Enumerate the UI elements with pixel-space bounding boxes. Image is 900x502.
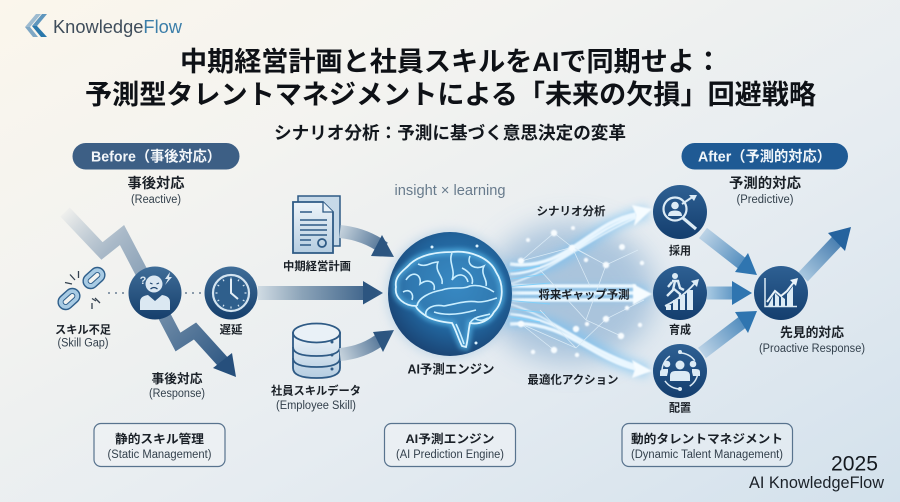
icon: training: [653, 266, 707, 320]
callout: static management: 静的スキル管理: [115, 431, 204, 446]
icon: database: [293, 324, 340, 378]
icon: stressed person: [128, 266, 182, 320]
icon: clock: [204, 266, 258, 320]
label: delay: 遅延: [220, 324, 242, 336]
icon: logo chevrons: [25, 14, 47, 37]
panel: data inputs: [258, 196, 394, 412]
after badge: [682, 143, 848, 170]
label: scenario analysis: シナリオ分析: [536, 204, 606, 218]
icon: glowing brain: [386, 230, 514, 358]
arrow: plan to engine: [340, 232, 394, 257]
arrow: growth up: [803, 227, 851, 277]
credit: year and source: 2025: [831, 452, 878, 476]
predictive heading: 予測的対応: [729, 175, 801, 191]
before badge: [72, 143, 240, 170]
dotted connector: [108, 292, 126, 294]
label: employee skill: [271, 384, 361, 412]
icon: recruit: [653, 185, 707, 239]
label: mid-term plan: 中期経営計画: [283, 259, 351, 273]
logo wordmark: KnowledgeFlow: [53, 16, 183, 37]
panel: before: [55, 143, 258, 400]
label: engine: AI予測エンジン: [408, 362, 494, 376]
predictive heading: (Predictive): [736, 194, 794, 206]
callout: static management: [94, 424, 225, 466]
icon: stressed person: ?: [140, 275, 147, 287]
label: future gap: 将来ギャップ予測: [538, 288, 630, 302]
callout: AI prediction engine: (AI Prediction Engine): [396, 449, 504, 461]
arrow: skills to engine: [340, 330, 394, 354]
predictive heading: [729, 175, 801, 206]
label: response: 事後対応: [152, 371, 203, 386]
arrow: placement to proactive: [702, 311, 757, 353]
label: proactive response: (Proactive Response): [759, 343, 865, 355]
icon: growth chart: [754, 266, 808, 320]
label: employee skill: 社員スキルデータ: [271, 384, 361, 398]
after badge: After（予測的対応）: [698, 148, 831, 166]
credit: year and source: AI KnowledgeFlow: [749, 474, 884, 492]
label: training: 育成: [669, 322, 691, 336]
callout: AI prediction engine: [384, 424, 516, 466]
icon: document: [293, 196, 340, 253]
icon: placement: [653, 344, 707, 398]
dotted connector: [185, 292, 203, 294]
title: 予測型タレントマネジメントによる「未来の欠損」回避戦略: [85, 80, 816, 110]
subtitle: シナリオ分析：予測に基づく意思決定の変革: [274, 123, 626, 143]
title: [85, 47, 816, 110]
label: employee skill: (Employee Skill): [276, 400, 356, 412]
label: optimised action: 最適化アクション: [528, 372, 618, 386]
label: response: (Response): [149, 388, 205, 400]
callout: static management: (Static Management): [108, 449, 212, 461]
panel: AI engine: [386, 183, 655, 386]
label: response: [149, 371, 205, 400]
label: placement: 配置: [669, 402, 691, 414]
label: proactive response: [759, 325, 865, 355]
arrow: training to proactive: [707, 281, 752, 305]
callout: dynamic talent management: [622, 424, 792, 466]
logo: KnowledgeFlow: [25, 14, 183, 37]
icon: broken chain: [55, 264, 108, 313]
label: proactive response: 先見的対応: [780, 325, 844, 340]
credit: year and source: [749, 452, 884, 492]
arrow: delay to engine: [258, 281, 383, 304]
data streams: [485, 205, 655, 378]
reactive heading: 事後対応: [128, 175, 184, 191]
label: insight x learning: insight × learning: [394, 183, 506, 199]
arrow: falling zigzag: [65, 212, 236, 377]
label: recruit: 採用: [669, 244, 691, 258]
callout: dynamic talent management: (Dynamic Talent Management): [631, 449, 783, 461]
callout: dynamic talent management: 動的タレントマネジメント: [631, 431, 783, 446]
arrow: recruit to proactive: [703, 233, 757, 275]
label: skill gap: スキル不足: [55, 324, 111, 336]
reactive heading: (Reactive): [131, 194, 181, 206]
reactive heading: [128, 175, 184, 206]
before badge: Before（事後対応）: [91, 148, 221, 166]
panel: after: [653, 143, 865, 414]
label: skill gap: [55, 324, 111, 350]
title: 中期経営計画と社員スキルをAIで同期せよ：: [180, 47, 722, 77]
callout: AI prediction engine: AI予測エンジン: [406, 431, 494, 446]
label: skill gap: (Skill Gap): [58, 338, 109, 350]
